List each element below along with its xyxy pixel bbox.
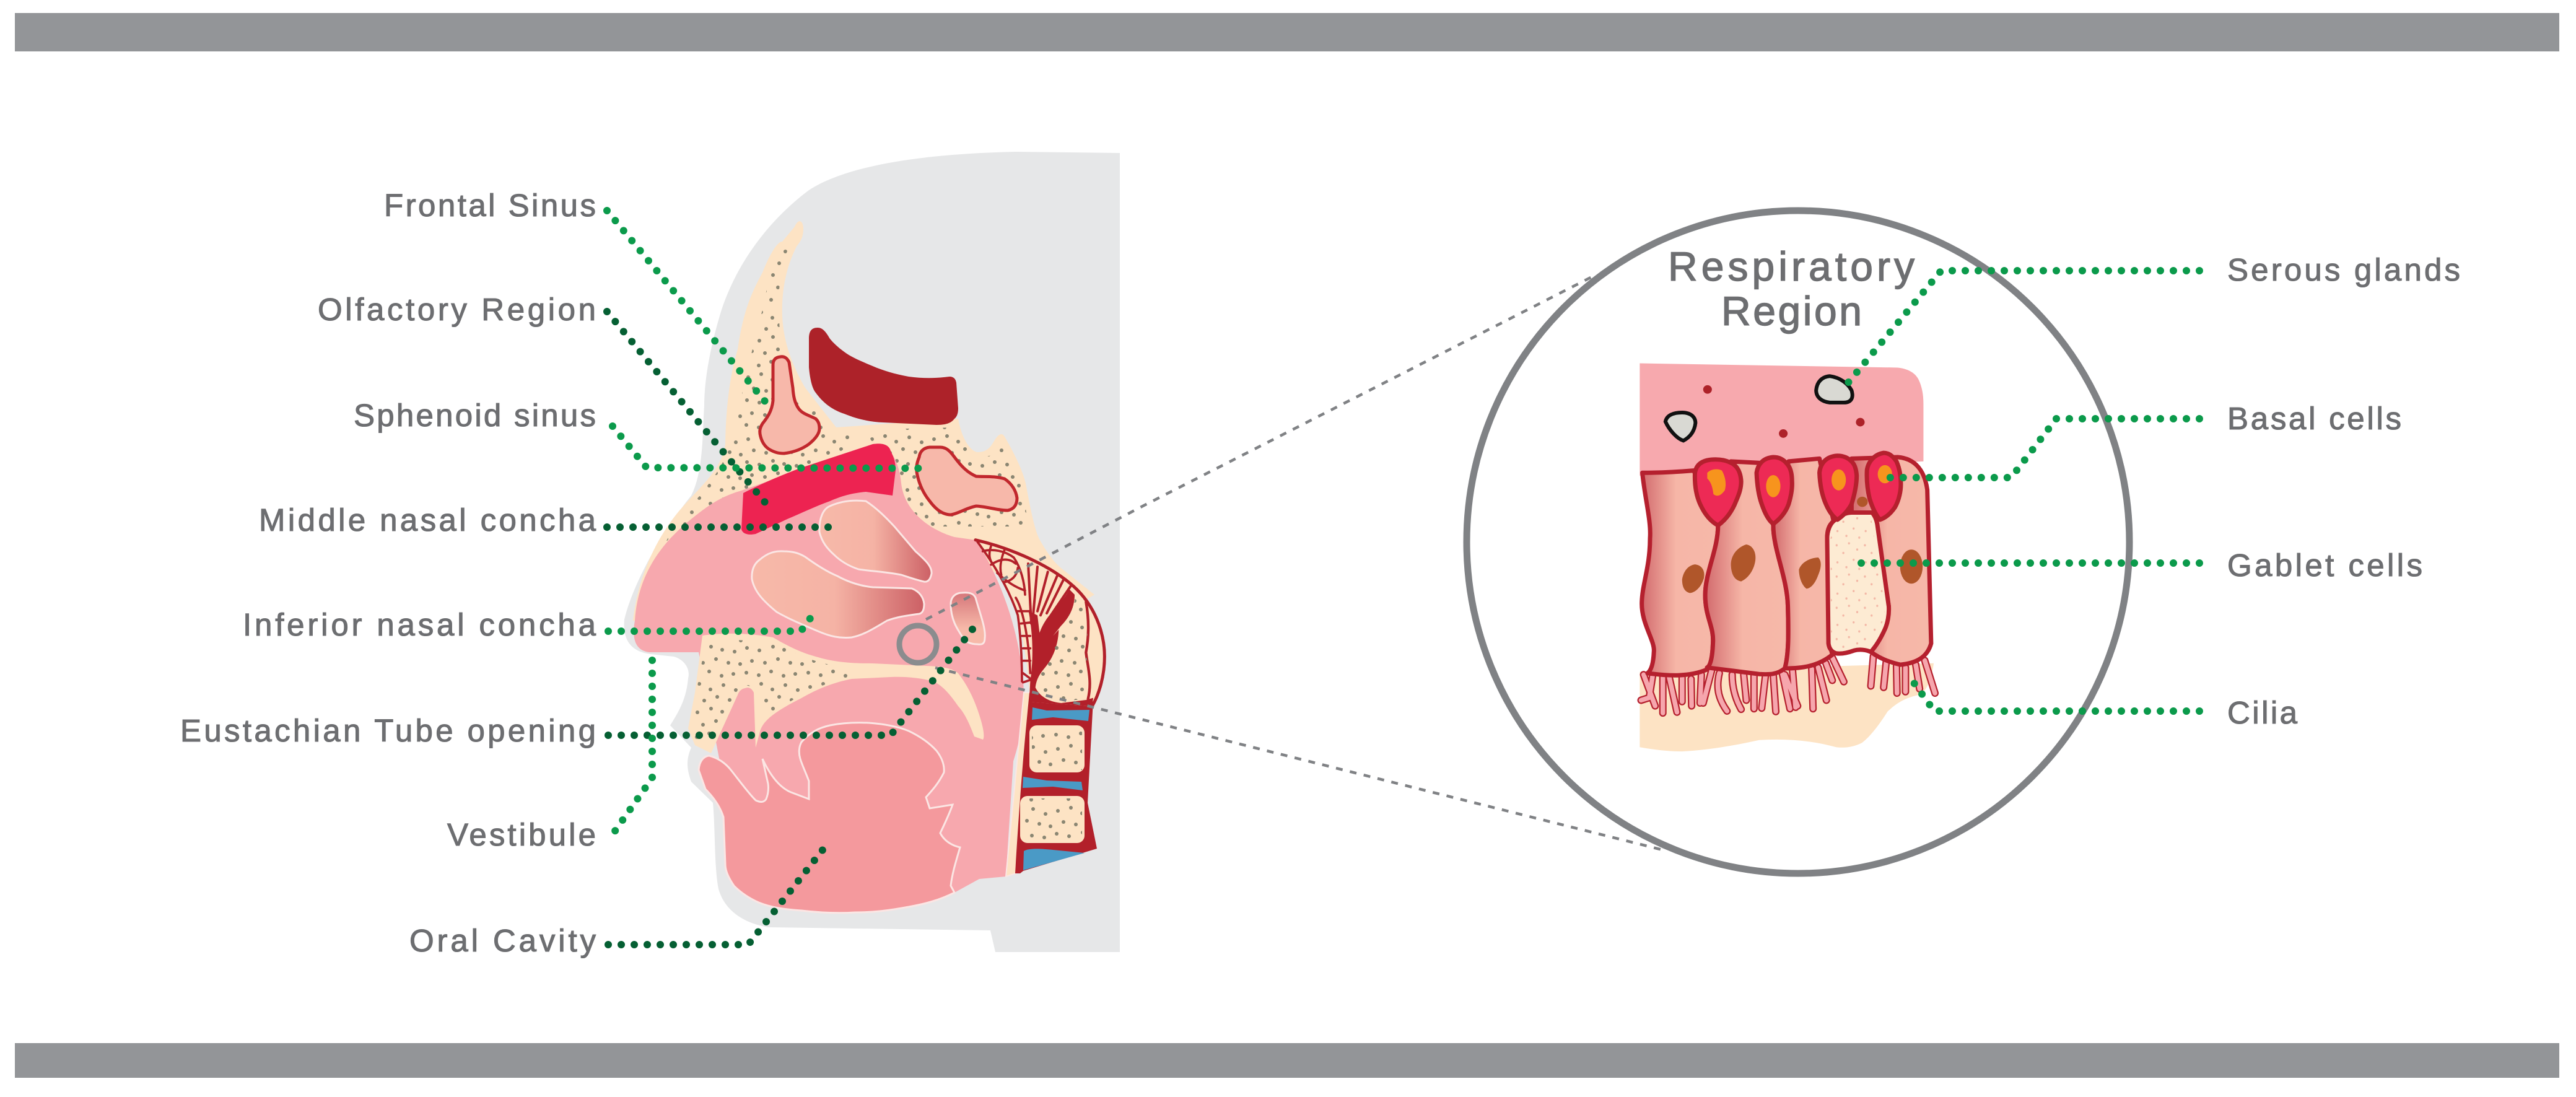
grey selection circle [899,626,937,663]
label: Cilia: Cilia [2227,695,2298,730]
olfactory region [741,444,896,535]
connective tissue [1639,364,1923,476]
label: Eustachian Tube opening: Eustachian Tube opening [180,713,596,748]
brown nuclei [1682,497,1923,593]
inferior nasal concha [752,551,924,638]
goblet cell [1827,513,1889,653]
top grey bar [15,13,2559,51]
orange nuclei [1707,465,1892,497]
vertebra lower stipple [1023,798,1082,841]
cilia [1641,656,1935,713]
cervical stipple [1036,592,1090,702]
label: Serous glands: Serous glands [2227,252,2460,287]
disc upper [1032,707,1089,721]
label: Frontal Sinus: Frontal Sinus [384,188,596,223]
serous gland 2 [1666,413,1695,440]
label: Oral Cavity: Oral Cavity [409,923,596,958]
basal cell 2 [1757,457,1792,524]
head silhouette [624,152,1120,952]
basal cell 1 [1695,460,1741,525]
bottom grey bar [15,1043,2559,1078]
disc lower [1023,849,1085,870]
palate stipple [692,639,855,746]
cervical vessel trunk [1029,590,1093,706]
zoom guide line upper [926,276,1593,619]
label: Eustachian Tube opening [180,629,972,748]
label: Basal cells [1885,401,2401,478]
columnar cell 4 [1851,457,1931,665]
label: Inferior nasal concha: Inferior nasal concha [243,607,596,642]
columnar cell 3 [1773,458,1833,668]
label: Oral Cavity [409,841,830,958]
vertebral column [1015,693,1097,873]
label: Sphenoid sinus: Sphenoid sinus [354,398,596,433]
palate bone [688,634,984,753]
goblet stipple [1830,516,1885,649]
jaw and oral cavity [699,723,960,913]
disc middle [1023,777,1083,790]
label: Frontal Sinus [384,188,766,402]
label: Serous glands [1847,252,2460,384]
eustachian tube opening [951,593,985,644]
heading: Respiratory Region: Respiratory [1668,243,1915,289]
panel: head cross-section [624,152,1120,952]
heading: Respiratory Region: Region [1721,288,1862,334]
sphenoid sinus shape [917,447,1017,515]
zoom guide line lower [935,668,1667,851]
label: Middle nasal concha: Middle nasal concha [259,502,596,538]
panel: respiratory region circle [1467,211,2129,873]
vertebra upper stipple [1032,728,1082,770]
basal cell 4 [1867,453,1901,520]
vertebra lower [1020,796,1085,843]
label: Olfactory Region: Olfactory Region [318,292,596,327]
icon: brain base [809,328,958,425]
label: Sphenoid sinus [354,398,919,468]
bone stipple [650,245,1028,588]
bone tissue [633,221,1094,621]
red dots [1703,385,1865,438]
label: Olfactory Region [318,292,766,503]
label: Cilia [1913,682,2298,730]
middle nasal concha [819,500,932,582]
upper cervical region [976,540,1104,706]
vertebra upper [1029,725,1085,772]
cervical bone [976,540,1104,706]
frontal sinus shape [760,357,819,453]
magnifier circle [1467,211,2129,873]
label: Basal cells: Basal cells [2227,401,2401,436]
label: Vestibule: Vestibule [447,817,596,852]
serous gland 1 [1816,376,1853,403]
basal cell 3 [1820,456,1857,520]
epithelium illustration [1639,364,1935,751]
columnar cell 1 [1642,471,1718,675]
label: Gablet cells: Gablet cells [2227,548,2422,583]
cervical vessels [976,540,1104,706]
label: Inferior nasal concha [243,607,818,642]
label: Vestibule [447,660,652,852]
nasal and pharyngeal cavity [634,444,1024,898]
columnar cell 2 [1705,461,1788,675]
spine beige strip [1006,693,1031,876]
basement layer [1639,663,1934,751]
